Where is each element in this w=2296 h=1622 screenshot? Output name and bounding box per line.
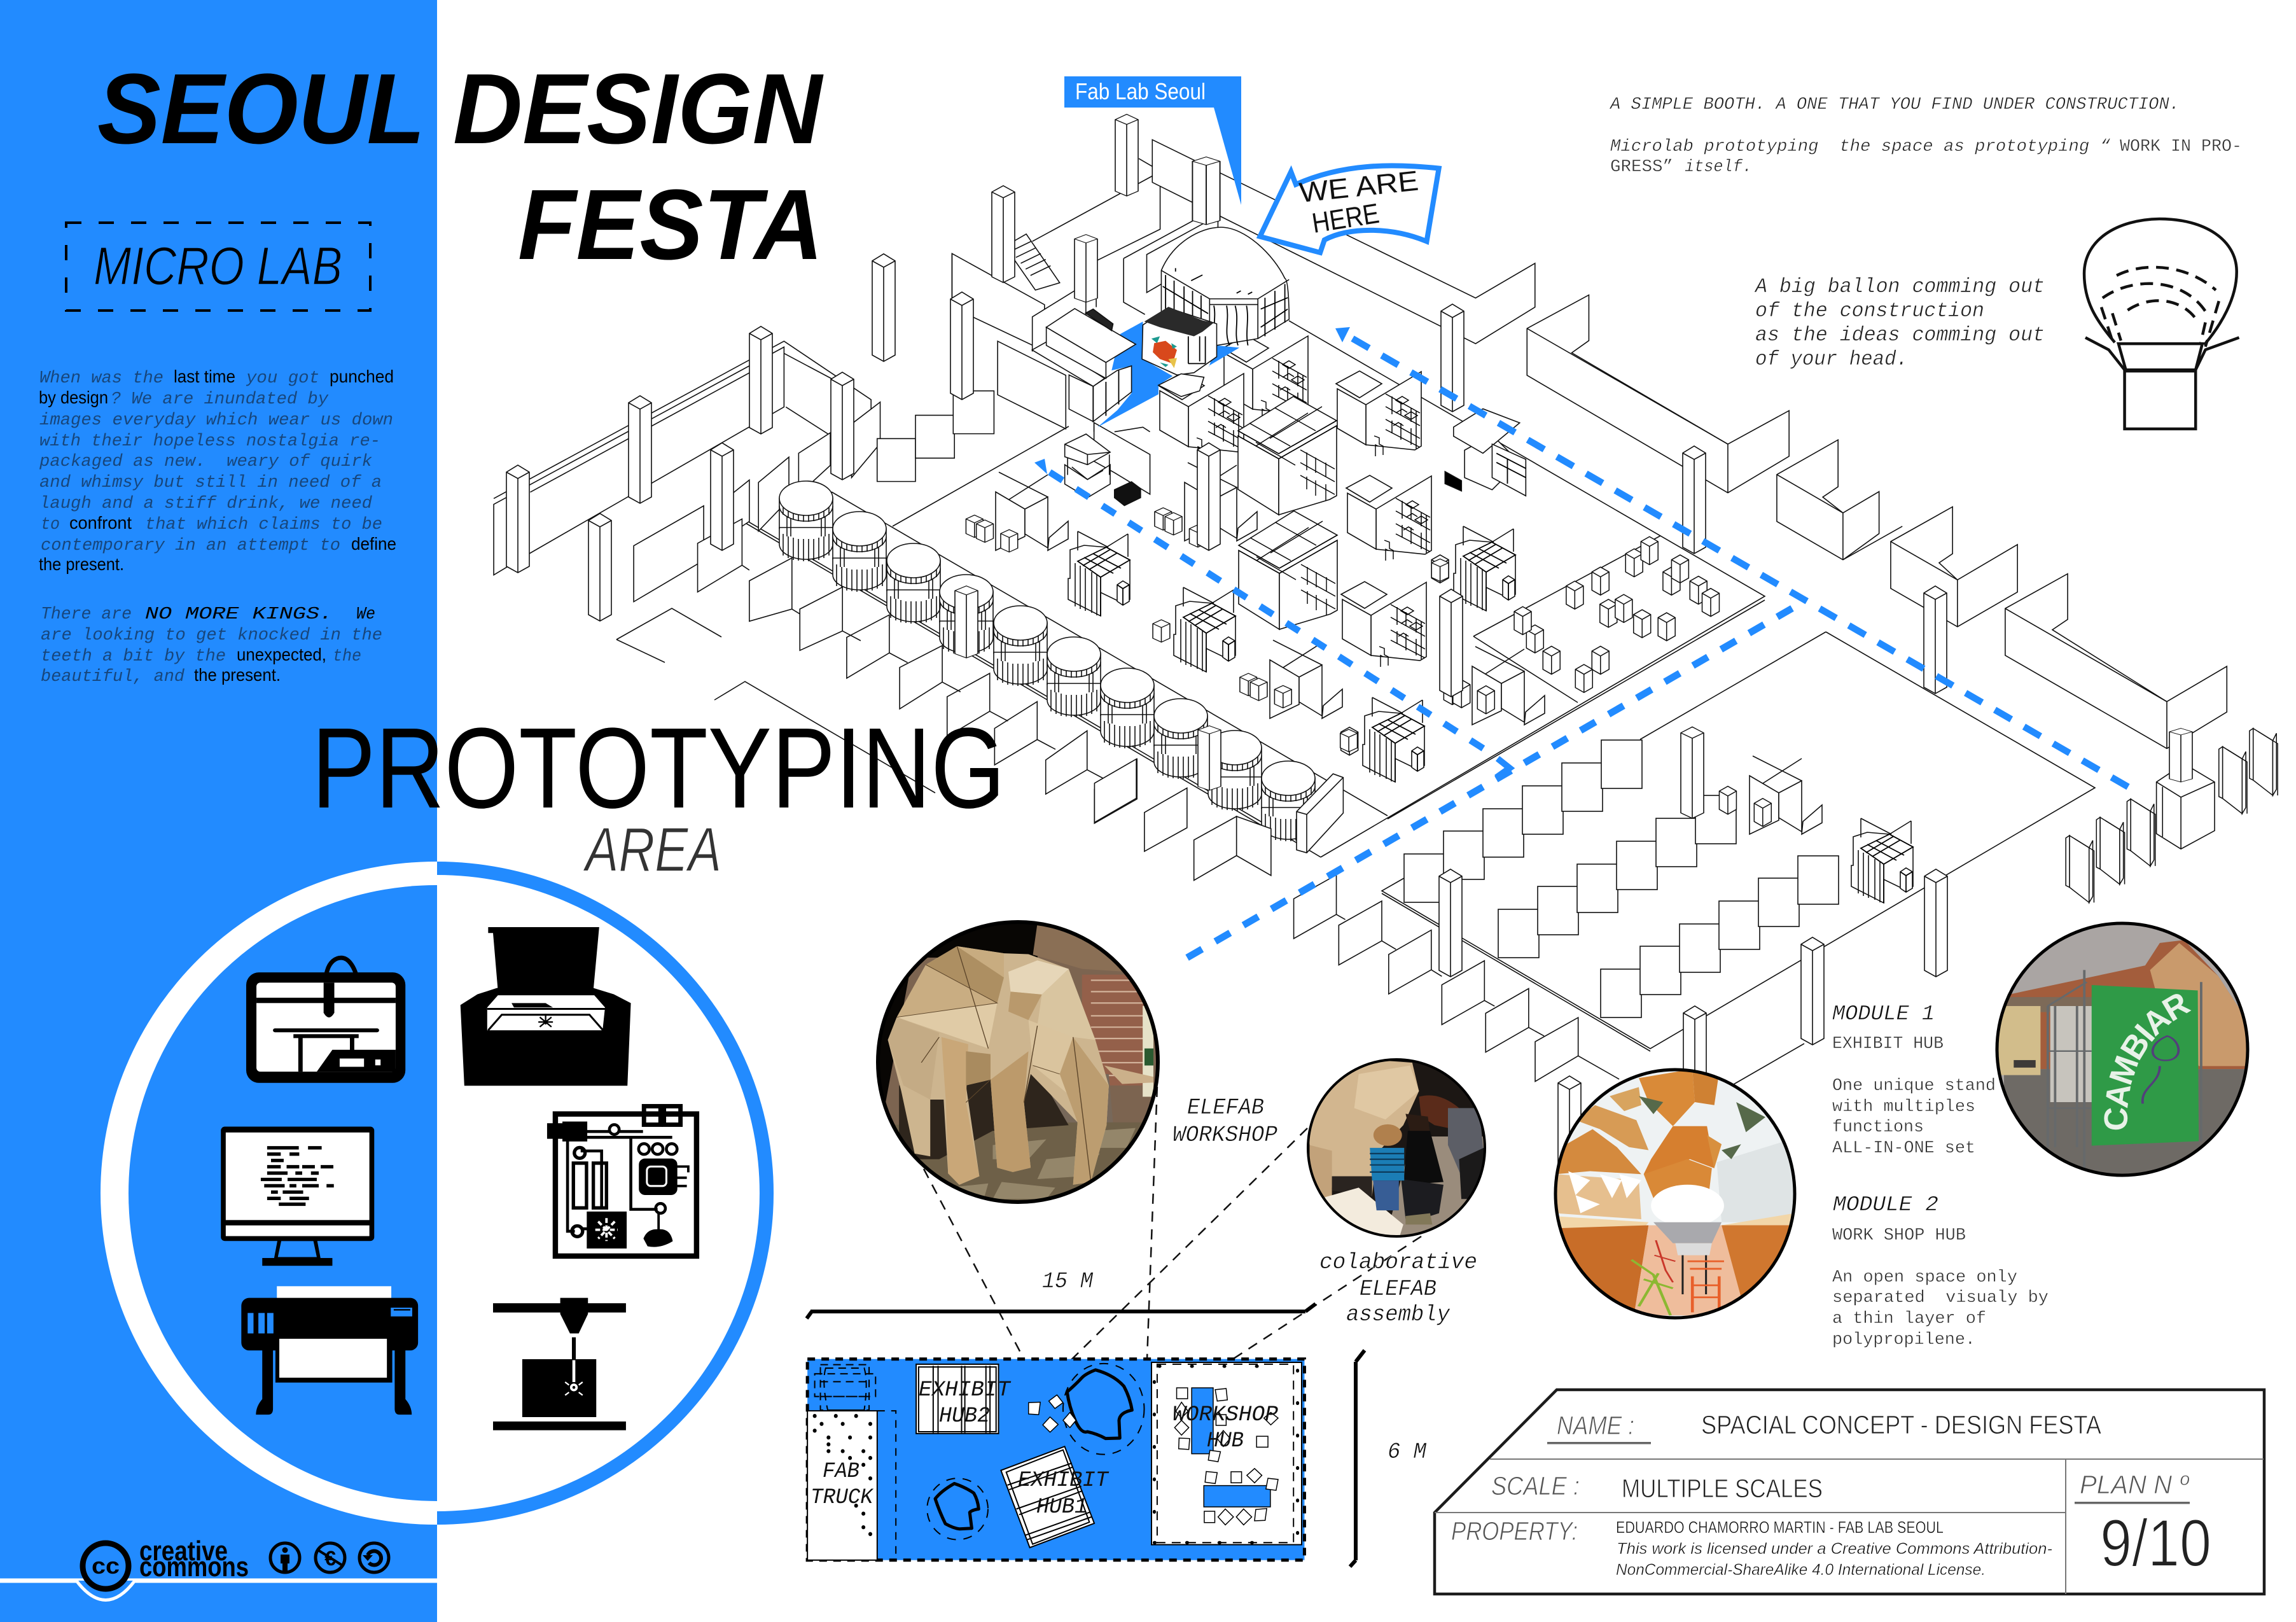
title block: This work is licensed under a Creative Commons Attribution- [1617, 1540, 2052, 1558]
title block: NAME : [1557, 1411, 1634, 1440]
dimension: 6 M [1350, 1350, 1427, 1567]
plan background [807, 1359, 1304, 1560]
intro paragraph: packaged as new. weary of quirk [39, 452, 372, 472]
module descriptions: MODULE 1 [1832, 1002, 1935, 1026]
title block [1435, 1390, 2264, 1594]
dashed connector lines [924, 1051, 1421, 1523]
balloon text: as the ideas comming out [1755, 323, 2045, 347]
collaborative label: colaborative [1319, 1250, 1477, 1275]
elefab workshop label [1172, 1095, 1277, 1148]
collaborative label [1319, 1250, 1477, 1327]
route arrowhead middle [1034, 459, 1047, 474]
title block: MULTIPLE SCALES [1622, 1474, 1823, 1503]
workshop hub [1151, 1362, 1302, 1544]
intro paragraph: that which claims to be [145, 515, 382, 535]
route dash line middle [1050, 472, 1495, 756]
prototyping heading: PROTOTYPING [312, 704, 1005, 832]
title: FESTA [518, 169, 823, 281]
title: SEOUL [97, 53, 425, 165]
intro paragraph: define [351, 534, 396, 554]
intro paragraph: by design [39, 388, 108, 407]
photo: family and elefab [1305, 1054, 1492, 1241]
concept text top right: WORK IN PRO- [2120, 137, 2242, 157]
creative commons bar: € [324, 1547, 336, 1570]
callout: we are here arrow: HERE [1310, 198, 1381, 239]
title block: SPACIAL CONCEPT - DESIGN FESTA [1701, 1410, 2102, 1439]
plan labels: EXHIBIT [1018, 1469, 1110, 1493]
junction arrowhead [1496, 759, 1510, 778]
callout: Fab Lab Seoul: Fab Lab Seoul [1075, 78, 1206, 104]
module descriptions: EXHIBIT HUB [1832, 1035, 1944, 1054]
creative commons bar [0, 1535, 437, 1600]
module descriptions: MODULE 2 [1833, 1193, 1938, 1217]
micro lab dashed box: MICRO LAB [94, 236, 342, 296]
intro paragraph: to [41, 515, 60, 535]
photo: cardboard elephant [876, 920, 1160, 1204]
no more kings paragraph: teeth a bit by the [41, 647, 226, 666]
module descriptions: with multiples [1832, 1098, 1975, 1117]
route dash line top [1353, 339, 2132, 789]
icon: computer monitor with code [221, 1127, 374, 1266]
creative commons bar: cc [92, 1553, 120, 1579]
blue booth floor [1097, 321, 1239, 427]
top right booth with shelving [1445, 409, 1526, 496]
exhibit hub 1 module [1001, 1446, 1094, 1548]
shelf booths [1158, 335, 1431, 667]
icon: balloon from box [2084, 219, 2239, 429]
intro paragraph: ? We are inundated by [111, 390, 329, 409]
plan labels: HUB [1207, 1429, 1244, 1453]
plan labels: TRUCK [811, 1486, 874, 1510]
intro paragraph: punched [330, 367, 394, 386]
plan labels [811, 1378, 1279, 1520]
intro paragraph: the present. [39, 554, 124, 574]
balloon text: A big ballon comming out [1754, 275, 2045, 298]
no more kings paragraph: There are [41, 605, 132, 624]
module descriptions: polypropilene. [1832, 1331, 1975, 1350]
no more kings paragraph: NO MORE KINGS. [145, 605, 333, 624]
banner lettering: CAMBIAR [2104, 994, 2191, 1130]
module descriptions: ALL-IN-ONE set [1832, 1139, 1975, 1158]
route dash line lower [1187, 608, 1792, 958]
micro lab dashed box [66, 223, 370, 311]
dimension: 15 M [807, 1269, 1316, 1318]
no more kings paragraph [41, 605, 382, 687]
blue side panel [0, 0, 437, 1622]
grid kiosks [1068, 526, 1913, 903]
callout: Fab Lab Seoul [1064, 76, 1241, 205]
creative commons bar: creative [139, 1535, 228, 1567]
balloon text: of your head. [1755, 347, 1908, 371]
dimension: 15 M: 15 M [1042, 1269, 1094, 1294]
icon: laser cutter [461, 927, 631, 1086]
plan labels: FAB [823, 1460, 859, 1484]
icon: 3D printing head [493, 1298, 626, 1430]
exhibition panels along front [800, 587, 1137, 823]
collaborative label: ELEFAB [1360, 1276, 1437, 1302]
collaborative label: assembly [1346, 1302, 1451, 1327]
elefab workshop label: ELEFAB [1187, 1095, 1264, 1121]
no more kings paragraph: the [333, 647, 361, 666]
booth near middle route start [1065, 423, 1150, 506]
title block: PROPERTY: [1451, 1516, 1578, 1546]
photo: module 1 banner [1995, 921, 2250, 1177]
stepped panels module rows [1404, 740, 1839, 1017]
intro paragraph: and whimsy but still in need of a [39, 473, 382, 493]
callout: we are here arrow [1260, 165, 1439, 253]
right end post groups [2066, 729, 2278, 902]
intro paragraph: confront [69, 513, 132, 533]
plan labels: EXHIBIT [919, 1378, 1012, 1402]
intro paragraph: contemporary in an attempt to [41, 536, 340, 556]
plan labels: HUB1 [1036, 1495, 1087, 1520]
icon: 3D printer [246, 958, 405, 1083]
no more kings paragraph: are looking to get knocked in the [41, 626, 382, 645]
module descriptions: An open space only [1832, 1268, 2017, 1287]
area subheading: AREA [583, 814, 721, 884]
module descriptions: separated visualy by [1832, 1289, 2049, 1308]
front slab booth [1158, 374, 1204, 396]
module descriptions: functions [1832, 1118, 1924, 1137]
upper left building walls [494, 158, 1218, 621]
balloon text [1754, 275, 2045, 371]
white kiosk [1069, 375, 1093, 421]
dimension: 6 M: 6 M [1388, 1439, 1427, 1465]
module descriptions: a thin layer of [1832, 1310, 1986, 1329]
plan labels: HUB2 [939, 1404, 990, 1429]
icon: large format printer [241, 1286, 418, 1415]
upper right walls [1152, 140, 2227, 748]
tall pillars [506, 115, 2192, 1184]
intro paragraph: When was the [39, 369, 164, 388]
Fab Lab Seoul booth with dome [1032, 227, 1289, 427]
floor outlines [616, 321, 2095, 1084]
elefab footprints [927, 1364, 1145, 1540]
module descriptions [1832, 1002, 2049, 1350]
isometric floor plan drawing [494, 115, 2278, 1184]
intro paragraph: with their hopeless nostalgia re- [39, 432, 380, 451]
concept text top right: GRESS” [1610, 158, 1673, 177]
big circle of machines [99, 862, 774, 1525]
module descriptions: WORK SHOP HUB [1832, 1226, 1966, 1245]
concept text top right: A SIMPLE BOOTH. A ONE THAT YOU FIND UNDER CONSTRUCTION. [1609, 95, 2180, 115]
title block: EDUARDO CHAMORRO MARTIN - FAB LAB SEOUL [1616, 1518, 1944, 1537]
cross partitions [996, 463, 1822, 834]
route dashes [1034, 327, 2132, 958]
concept text top right: itself. [1685, 158, 1752, 177]
plan labels: WORKSHOP [1172, 1403, 1279, 1427]
title [97, 53, 824, 281]
fab truck area [807, 1365, 896, 1560]
exhibit hub 2 module [916, 1364, 999, 1434]
drums [779, 481, 1315, 841]
module descriptions: One unique stand [1832, 1077, 1996, 1096]
intro paragraph: images everyday which wear us down [39, 411, 393, 430]
no more kings paragraph: the present. [194, 665, 281, 685]
intro paragraph: you got [246, 369, 319, 388]
intro paragraph: last time [174, 367, 235, 386]
title block: NonCommercial-ShareAlike 4.0 International License. [1616, 1561, 1986, 1579]
creative commons bar: commons [139, 1551, 249, 1583]
poster and splatter wall [1142, 308, 1216, 375]
title block: 9/10 [2100, 1506, 2211, 1581]
balloon text: of the construction [1755, 299, 1984, 323]
no more kings paragraph: unexpected, [237, 645, 326, 664]
callout: we are here arrow: WE ARE [1298, 165, 1420, 209]
elefab workshop label: WORKSHOP [1172, 1122, 1277, 1148]
no more kings paragraph: We [356, 605, 375, 624]
title block: SCALE : [1491, 1471, 1580, 1500]
small boxes [1341, 536, 1771, 827]
icon: circuit board [548, 1106, 697, 1256]
intro paragraph [39, 367, 396, 574]
title: DESIGN [453, 53, 824, 165]
concept text top right [1609, 95, 2242, 177]
site plan [807, 1359, 1304, 1560]
no more kings paragraph: beautiful, and [41, 668, 185, 687]
photo: module 2 interior [1547, 1066, 1804, 1324]
title block: PLAN N º [2080, 1470, 2190, 1499]
concept text top right: Microlab prototyping the space as prototyping “ [1610, 137, 2111, 157]
route arrowhead top [1335, 327, 1350, 342]
intro paragraph: laugh and a stiff drink, we need [39, 494, 373, 514]
